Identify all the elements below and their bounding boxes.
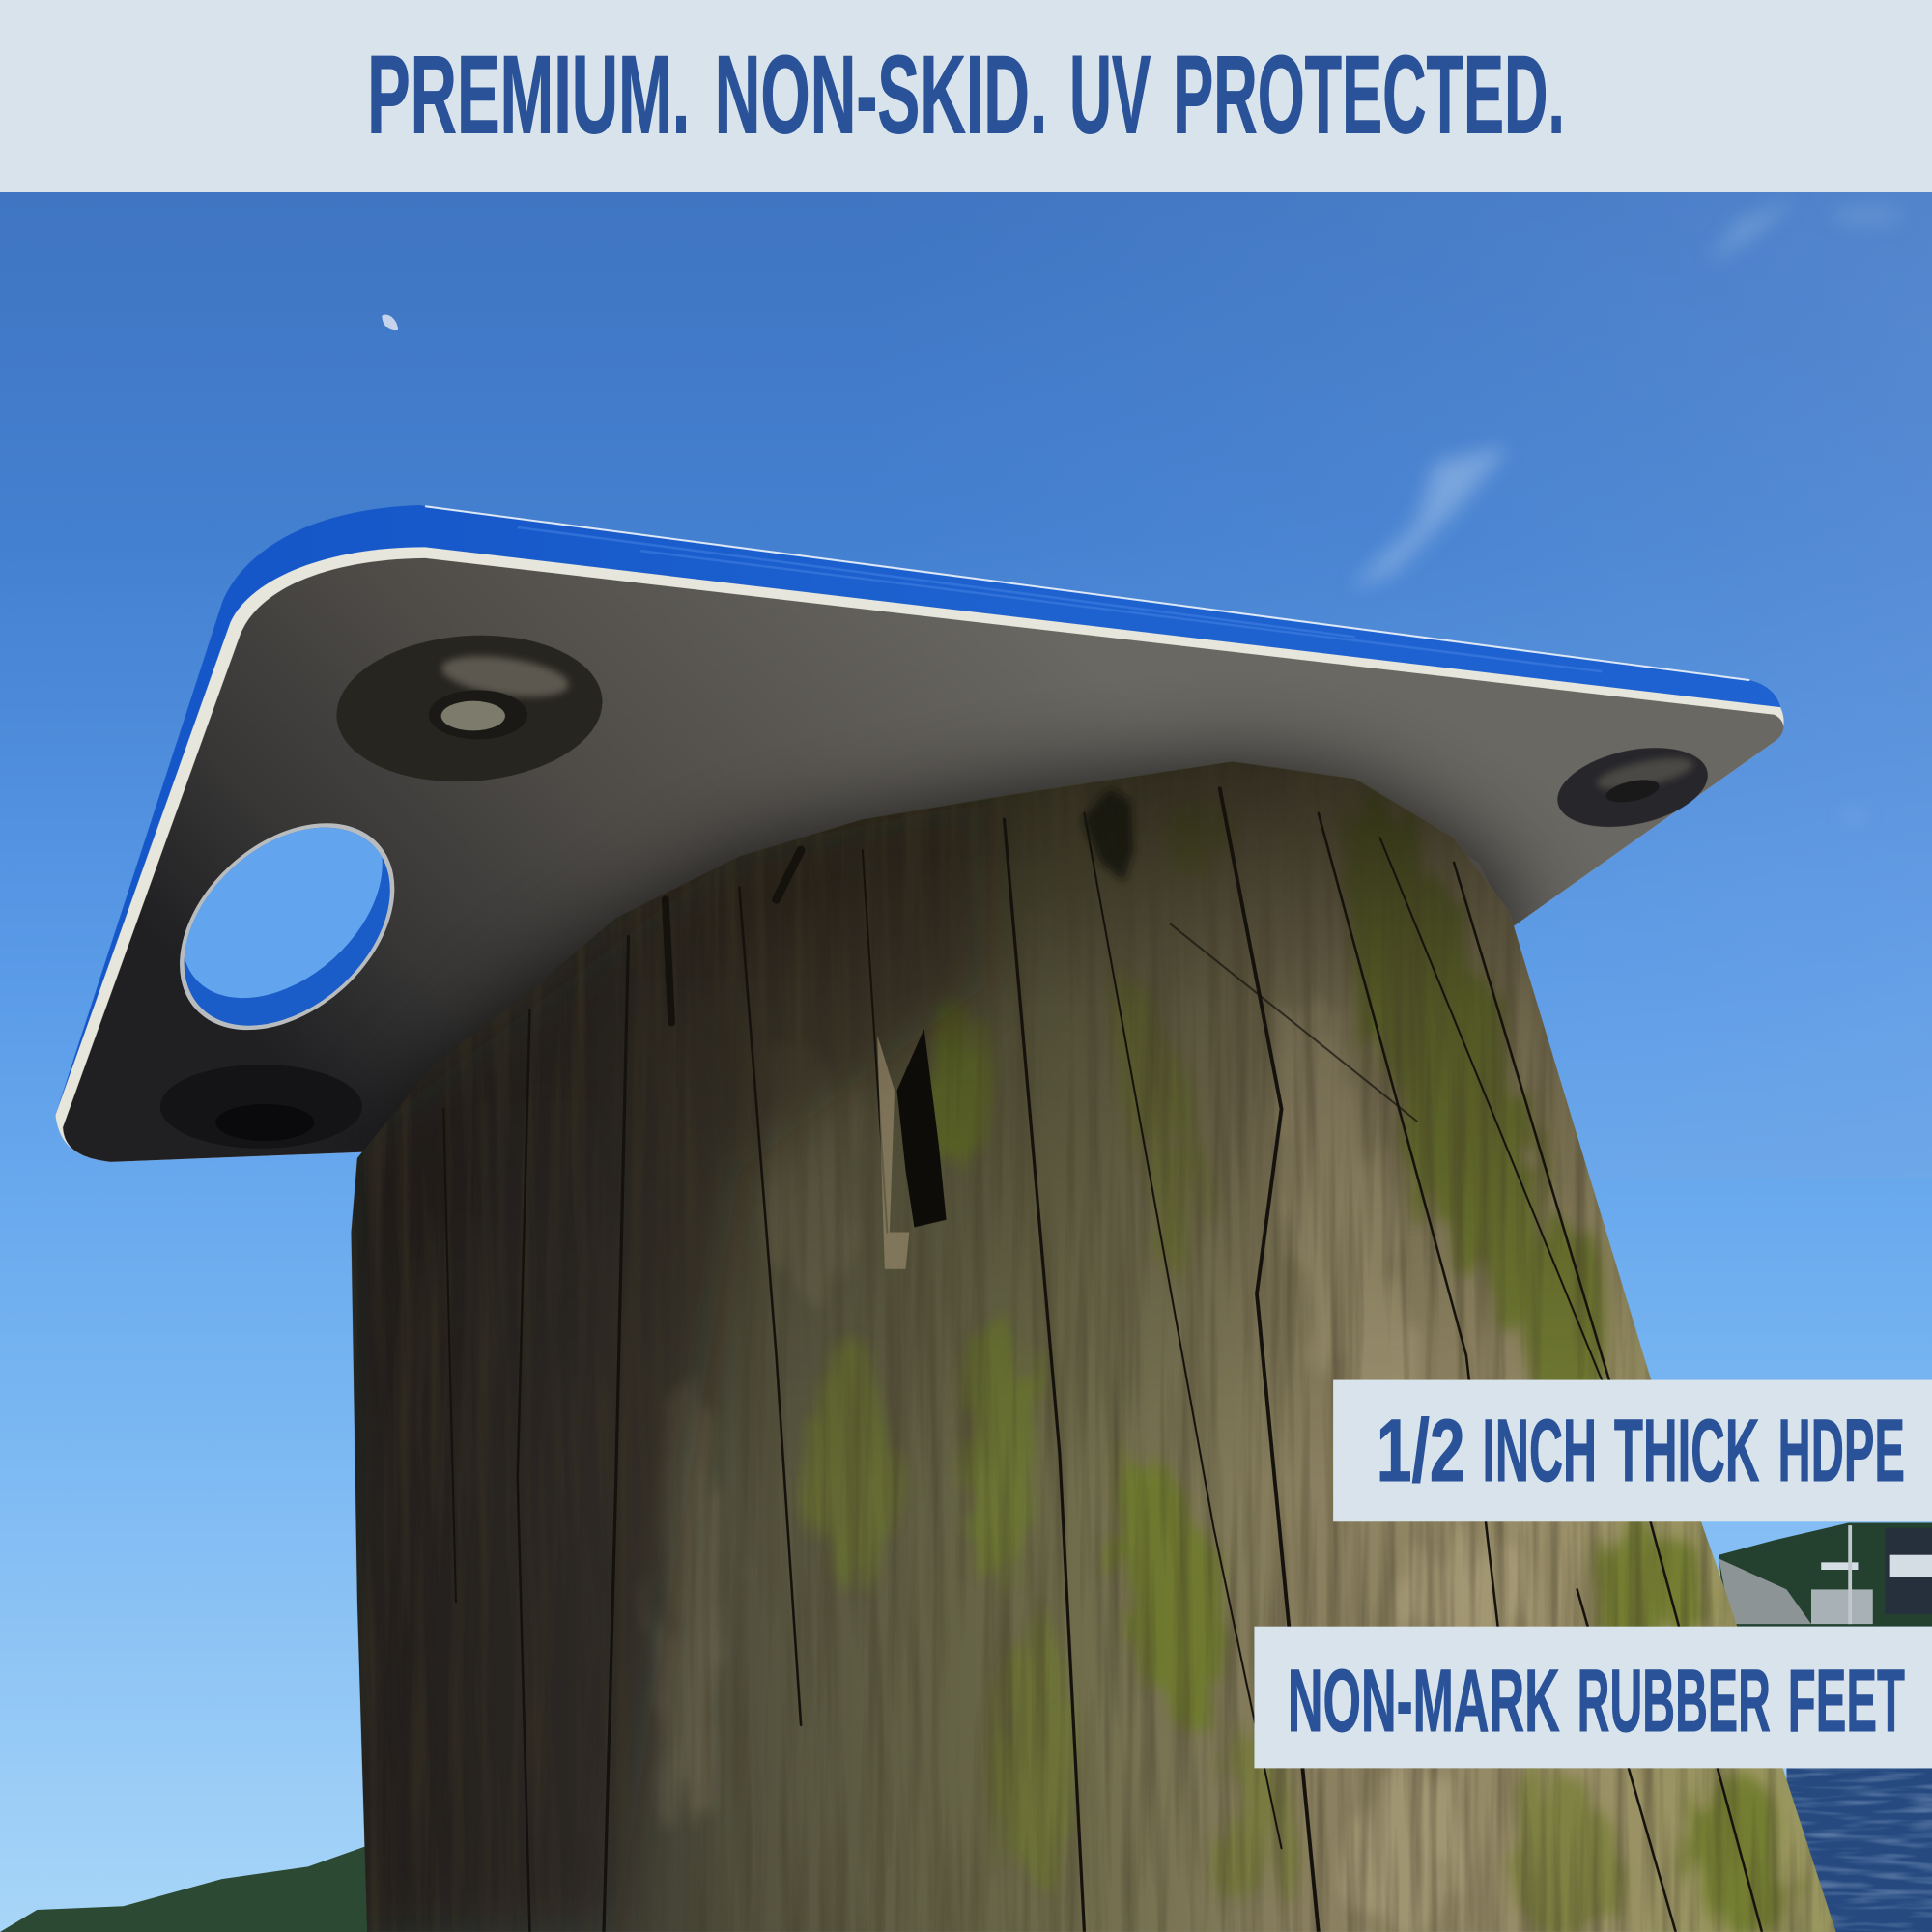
distant shoreline left — [0, 1846, 370, 1932]
plate hole — [180, 823, 394, 1030]
title — [367, 34, 1565, 157]
wispy clouds — [1350, 197, 1904, 823]
rubber foot: bottom left — [160, 1065, 362, 1149]
title: PROTECTED. — [1173, 34, 1565, 157]
plate: white edge line and grey underside — [55, 547, 1784, 1182]
split in wood — [897, 1029, 947, 1227]
shadow under plate — [352, 761, 1650, 1390]
callout: thickness: 1/2 — [1377, 1402, 1465, 1500]
water — [1786, 1768, 1932, 1932]
plate: blue top edge — [55, 505, 1781, 1127]
rubber foot: right — [1550, 735, 1715, 839]
cracks — [443, 788, 1762, 1932]
title: NON-SKID. — [715, 34, 1047, 157]
callout: rubber feet: NON-MARK — [1288, 1652, 1560, 1750]
callout: rubber feet — [1254, 1627, 1932, 1768]
knot hole top — [1082, 788, 1133, 881]
title: PREMIUM. — [367, 34, 690, 157]
moss patches — [807, 768, 1803, 1932]
moon — [382, 315, 398, 330]
header band — [0, 0, 1932, 192]
callout: thickness: INCH — [1482, 1402, 1597, 1500]
title: UV — [1069, 34, 1151, 157]
distant shoreline right with houses — [1719, 1523, 1932, 1627]
callout: thickness — [1333, 1380, 1932, 1521]
callout: thickness: THICK — [1614, 1402, 1759, 1500]
rubber foot: top — [331, 627, 608, 790]
wood grain — [345, 752, 1842, 1932]
wooden piling — [345, 752, 1842, 1932]
pale weathered patches — [653, 992, 1540, 1932]
